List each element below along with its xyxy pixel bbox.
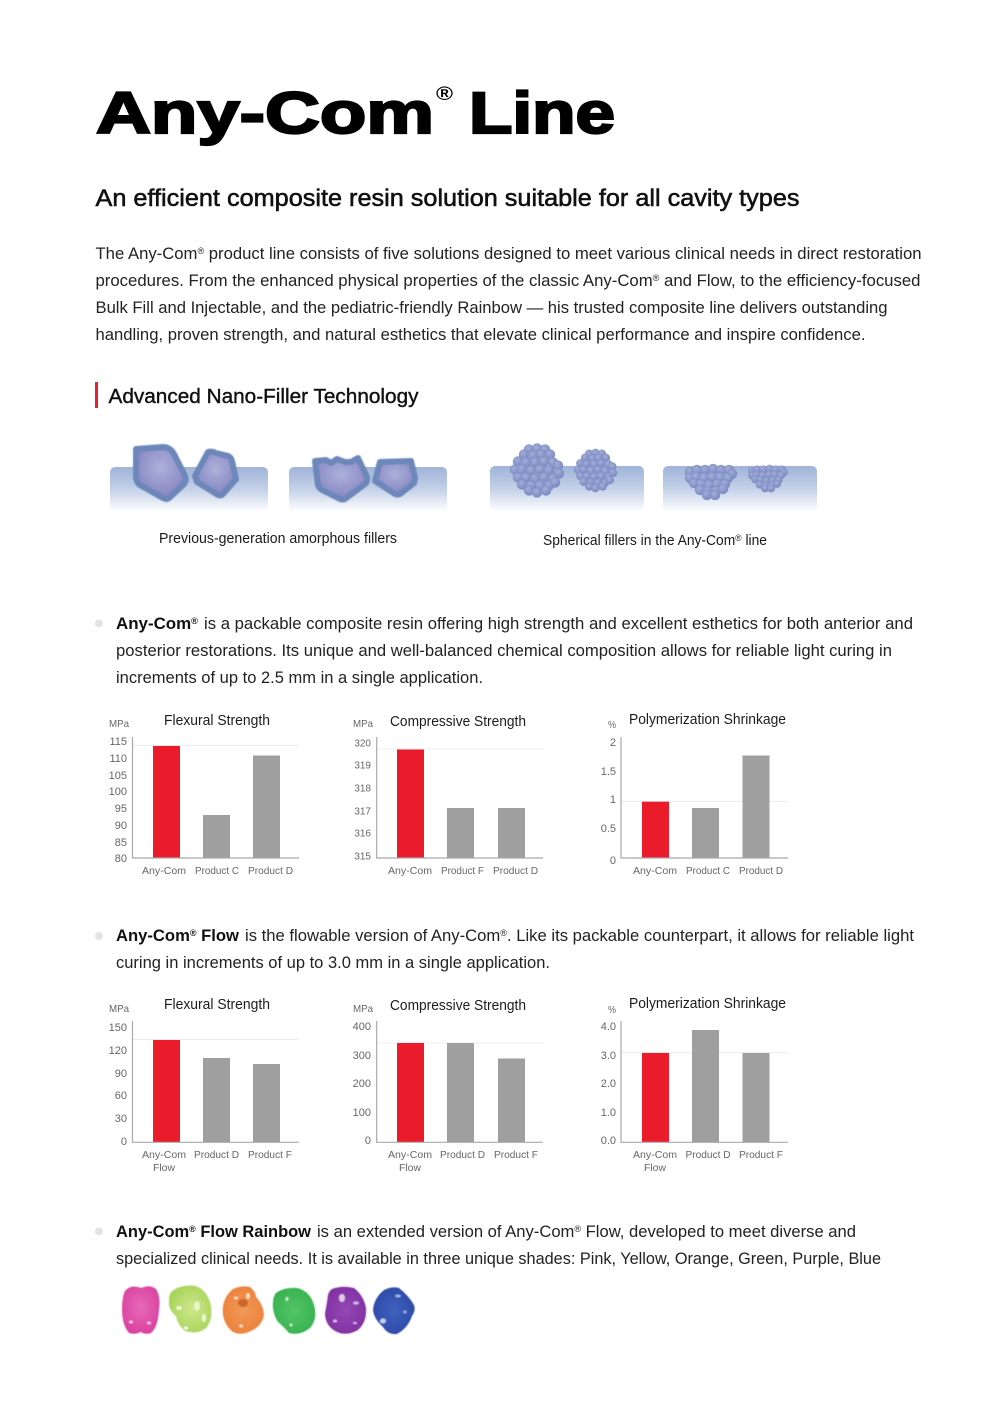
subtitle heading: An efficient composite resin solution suitable for all cavity types xyxy=(96,185,799,212)
chart: Any-Com flexural strength: 85 xyxy=(115,837,127,849)
chart: Flow flexural strength: Any-Com xyxy=(142,1149,186,1161)
chart: Flow compressive strength: 0 xyxy=(365,1135,371,1147)
chart: Flow compressive strength: Any-Com xyxy=(388,1149,432,1161)
chart: Flow flexural strength xyxy=(109,997,299,1174)
icon: green tooth xyxy=(273,1288,315,1334)
intro paragraph: product line consists of five solutions designed to meet various clinical needs in direct restoration xyxy=(204,245,921,263)
chart: Any-Com polymerization shrinkage: Product D xyxy=(739,865,783,877)
chart: Any-Com flexural strength: Product C xyxy=(195,865,239,877)
intro paragraph: handling, proven strength, and natural esthetics that elevate clinical performance and inspire confidence. xyxy=(96,326,866,344)
filler diagram before polishing xyxy=(110,447,268,512)
bullet: Any-Com description: Any-Com xyxy=(116,615,189,633)
chart: Any-Com flexural strength xyxy=(109,713,299,877)
chart: Any-Com compressive strength: 316 xyxy=(354,828,371,840)
chart: Flow polymerization shrinkage: Product D xyxy=(686,1149,731,1161)
chart: Any-Com compressive strength: Compressive Strength xyxy=(390,714,526,730)
caption: Previous-generation amorphous fillers xyxy=(159,531,397,547)
bullet: Any-Com Flow description: Any-Com xyxy=(116,927,189,945)
chart: Any-Com compressive strength: 315 xyxy=(354,852,371,862)
chart: Flow compressive strength: 400 xyxy=(353,1021,371,1033)
chart: Any-Com polymerization shrinkage: % xyxy=(608,719,616,731)
bullet: Any-Com Flow Rainbow description: ® xyxy=(189,1224,196,1234)
bullet: Any-Com Flow description xyxy=(95,927,914,972)
chart: Any-Com polymerization shrinkage: Polymerization Shrinkage xyxy=(629,712,786,728)
rainbow shade teeth xyxy=(122,1286,415,1334)
bullet: Any-Com Flow Rainbow description: Flow, developed to meet diverse and xyxy=(581,1223,856,1241)
chart: Any-Com polymerization shrinkage: 1 xyxy=(610,794,616,806)
bullet: Any-Com description: posterior restorations. Its unique and well-balanced chemical composition allows for reliable light curing in xyxy=(116,642,892,660)
chart: Flow flexural strength: Flexural Strength xyxy=(164,997,270,1013)
chart: Flow polymerization shrinkage: % xyxy=(608,1004,616,1016)
chart: Any-Com flexural strength: 105 xyxy=(109,770,127,782)
chart: Any-Com compressive strength: MPa xyxy=(353,718,373,730)
title xyxy=(96,81,615,146)
chart: Flow polymerization shrinkage xyxy=(601,996,788,1174)
icon: yellow-green tooth xyxy=(169,1286,211,1332)
chart: Flow flexural strength: Product F xyxy=(248,1149,292,1161)
chart: Any-Com compressive strength: Any-Com xyxy=(388,865,432,877)
chart: Flow polymerization shrinkage: 0.0 xyxy=(601,1135,616,1147)
chart: Any-Com compressive strength: 318 xyxy=(354,784,371,794)
chart: Flow polymerization shrinkage: 1.0 xyxy=(601,1107,616,1119)
chart: Any-Com compressive strength: Product F xyxy=(441,865,484,877)
chart: Any-Com flexural strength: Flexural Strength xyxy=(164,713,270,729)
intro paragraph xyxy=(96,245,922,344)
icon: pink tooth xyxy=(122,1286,160,1334)
icon: purple tooth xyxy=(325,1287,366,1334)
chart: Flow compressive strength: Flow xyxy=(399,1162,421,1174)
chart: Any-Com polymerization shrinkage: Product C xyxy=(686,865,730,877)
bullet: Any-Com Flow description: ® xyxy=(500,928,507,938)
chart: Any-Com flexural strength: 100 xyxy=(109,786,127,798)
chart: Flow flexural strength: 120 xyxy=(109,1045,127,1057)
intro paragraph: The Any-Com xyxy=(96,245,196,263)
chart: Any-Com flexural strength: Any-Com xyxy=(142,865,186,877)
bullet: Any-Com description: is a packable composite resin offering high strength and excellent esthetics for both anterior and xyxy=(204,615,913,633)
chart: Flow flexural strength: 0 xyxy=(121,1136,127,1148)
chart: Any-Com flexural strength: 90 xyxy=(115,820,127,832)
chart: Any-Com polymerization shrinkage: Any-Com xyxy=(633,865,677,877)
chart: Any-Com compressive strength: 317 xyxy=(354,806,371,818)
bullet: Any-Com description: ® xyxy=(191,616,198,626)
chart: Flow polymerization shrinkage: 2.0 xyxy=(601,1078,616,1090)
diagram: previous-generation amorphous fillers xyxy=(110,447,447,547)
chart: Flow compressive strength: 300 xyxy=(353,1050,371,1062)
chart: Any-Com polymerization shrinkage xyxy=(601,712,788,877)
chart: Any-Com flexural strength: 80 xyxy=(115,853,127,865)
chart: Flow compressive strength: MPa xyxy=(353,1003,373,1015)
chart: Any-Com polymerization shrinkage: 1.5 xyxy=(601,766,616,778)
chart: Any-Com polymerization shrinkage: 0 xyxy=(610,855,616,867)
chart: Any-Com flexural strength: 95 xyxy=(115,803,127,815)
title: Any-Com xyxy=(96,81,434,146)
chart: Any-Com polymerization shrinkage: 0.5 xyxy=(601,823,616,835)
chart: Flow polymerization shrinkage: 3.0 xyxy=(601,1050,616,1062)
chart: Any-Com flexural strength: MPa xyxy=(109,718,129,730)
bullet: Any-Com Flow Rainbow description: ® xyxy=(574,1224,581,1234)
chart: Any-Com compressive strength: 320 xyxy=(354,738,371,750)
icon: orange tooth xyxy=(223,1286,264,1334)
intro paragraph: and Flow, to the efficiency-focused xyxy=(659,272,920,290)
chart: Flow compressive strength: Product F xyxy=(494,1149,538,1161)
chart: Flow flexural strength: 60 xyxy=(115,1090,127,1102)
title: ® xyxy=(436,84,453,105)
title: Line xyxy=(469,81,615,146)
bullet: Any-Com Flow description: Flow xyxy=(197,927,239,945)
bullet: Any-Com Flow description: . Like its packable counterpart, it allows for reliable light xyxy=(507,927,914,945)
chart: Flow polymerization shrinkage: Flow xyxy=(644,1162,666,1174)
bullet: Any-Com Flow Rainbow description: Any-Com xyxy=(116,1223,189,1241)
bullet: Any-Com Flow description: is the flowable version of Any-Com xyxy=(245,927,498,945)
spherical diagram before polishing xyxy=(490,444,644,512)
bullet: Any-Com Flow Rainbow description: is an extended version of Any-Com xyxy=(317,1223,573,1241)
chart: Any-Com flexural strength: 110 xyxy=(109,753,127,765)
chart: Flow compressive strength: Product D xyxy=(440,1149,485,1161)
chart: Any-Com polymerization shrinkage: 2 xyxy=(610,737,616,749)
chart: Flow polymerization shrinkage: 4.0 xyxy=(601,1021,616,1033)
bullet: Any-Com Flow Rainbow description xyxy=(95,1223,881,1268)
chart: Flow polymerization shrinkage: Any-Com xyxy=(633,1149,677,1161)
chart: Flow compressive strength xyxy=(353,998,544,1174)
bullet: Any-Com Flow Rainbow description: specialized clinical needs. It is available in three unique shades: Pink, Yellow, Orange, Green, Purple, Blue xyxy=(116,1250,881,1268)
intro paragraph: ® xyxy=(653,273,660,283)
chart: Any-Com compressive strength: 319 xyxy=(354,760,371,772)
bullet: Any-Com Flow Rainbow description: Flow Rainbow xyxy=(196,1223,311,1241)
icon: blue tooth xyxy=(373,1287,415,1334)
intro paragraph: ® xyxy=(197,246,205,256)
intro paragraph: procedures. From the enhanced physical properties of the classic Any-Com xyxy=(96,272,645,290)
caption: ® xyxy=(735,533,742,543)
chart: Flow polymerization shrinkage: Polymerization Shrinkage xyxy=(629,996,786,1012)
chart: Flow polymerization shrinkage: Product F xyxy=(739,1149,783,1161)
bullet: Any-Com Flow description: curing in increments of up to 3.0 mm in a single application. xyxy=(116,954,550,972)
filler diagram after polishing xyxy=(289,458,447,512)
caption: Spherical fillers in the Any-Com xyxy=(543,533,744,549)
chart: Flow flexural strength: 150 xyxy=(109,1022,127,1034)
chart: Flow compressive strength: 200 xyxy=(353,1078,371,1090)
bullet: Any-Com description xyxy=(95,615,913,687)
bullet: Any-Com description: increments of up to 2.5 mm in a single application. xyxy=(116,669,483,687)
chart: Any-Com compressive strength: Product D xyxy=(493,865,538,877)
chart: Flow flexural strength: Flow xyxy=(153,1162,175,1174)
spherical diagram after polishing xyxy=(663,464,817,512)
chart: Flow flexural strength: 30 xyxy=(115,1113,127,1125)
chart: Flow flexural strength: Product D xyxy=(194,1149,239,1161)
intro paragraph: Bulk Fill and Injectable, and the pediatric-friendly Rainbow — his trusted composite line delivers outstanding xyxy=(96,299,888,317)
chart: Any-Com flexural strength: Product D xyxy=(248,865,293,877)
chart: Any-Com flexural strength: 115 xyxy=(109,736,127,748)
bullet: Any-Com Flow description: ® xyxy=(190,928,197,938)
chart: Any-Com compressive strength xyxy=(353,714,544,877)
diagram: spherical fillers xyxy=(490,444,817,549)
chart: Flow flexural strength: 90 xyxy=(115,1068,127,1080)
section heading: nano-filler technology: Advanced Nano-Filler Technology xyxy=(108,385,419,408)
chart: Flow compressive strength: 100 xyxy=(353,1107,371,1119)
caption: line xyxy=(742,533,767,549)
chart: Flow flexural strength: MPa xyxy=(109,1003,129,1015)
chart: Flow compressive strength: Compressive Strength xyxy=(390,998,526,1014)
